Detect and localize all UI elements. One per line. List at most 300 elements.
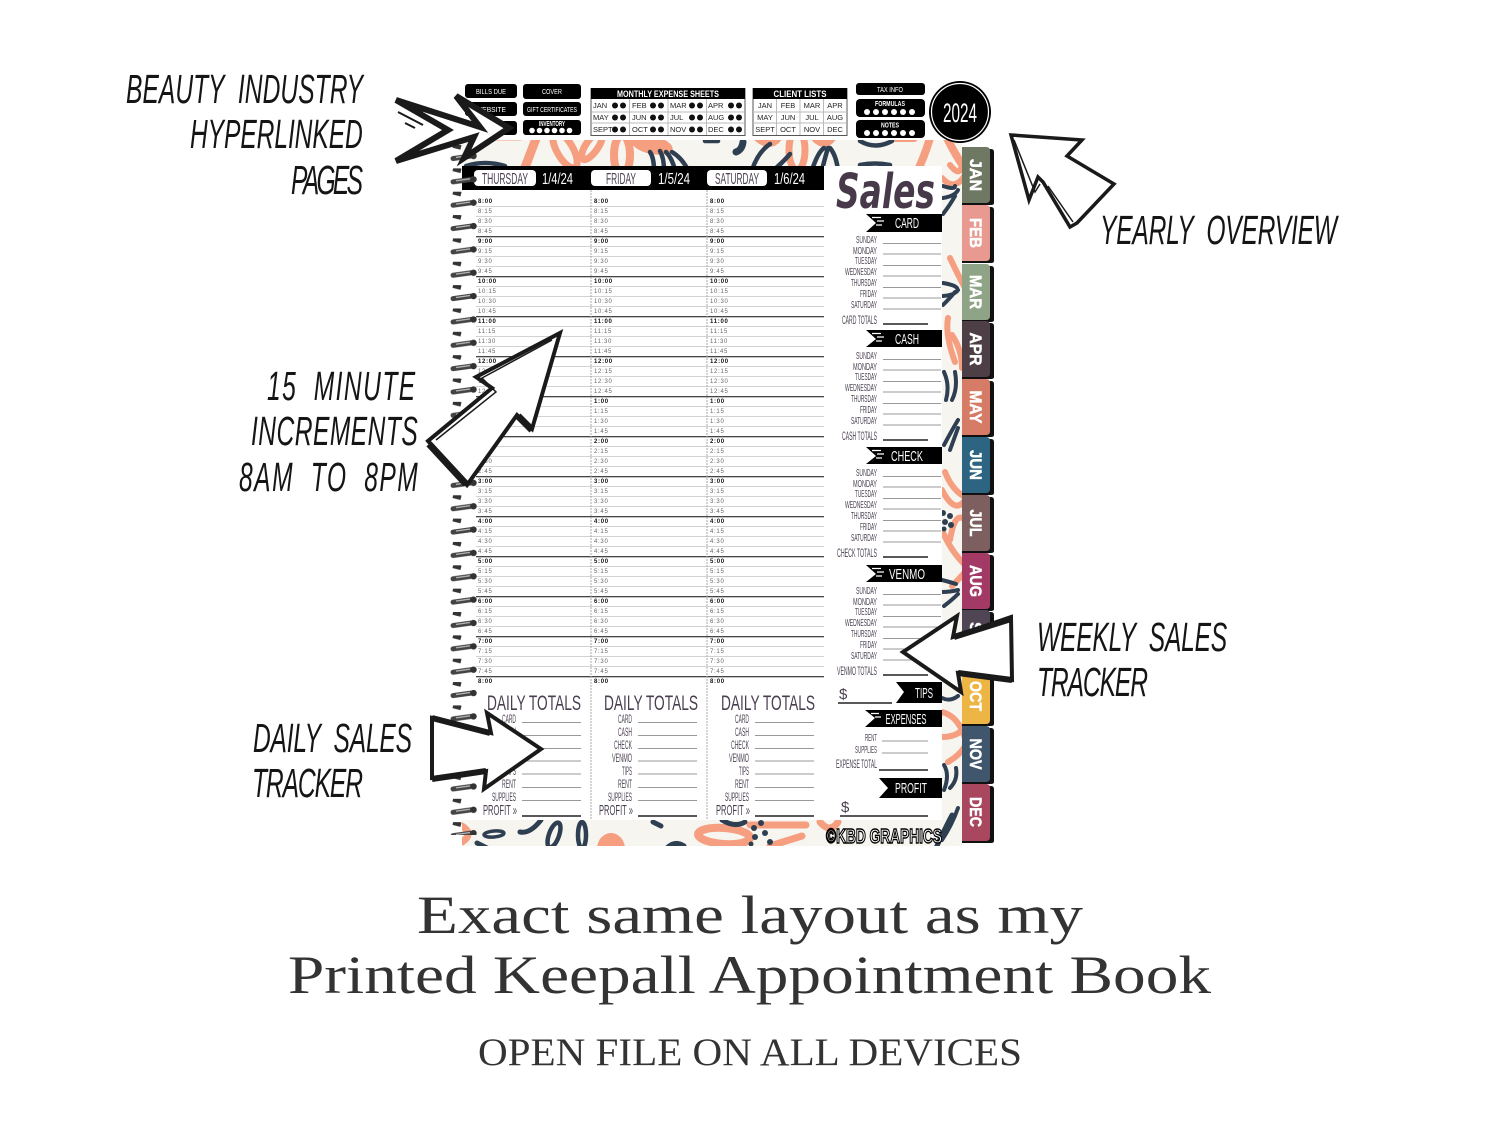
time column: Saturday: 1:45: [710, 429, 724, 435]
time column: Friday: 7:15: [594, 649, 608, 655]
label: 15 minute increments 8am to 8pm: 8AM TO 8PM: [239, 455, 418, 501]
sales tracker: check: THURSDAY: [851, 511, 877, 522]
header bar: three days with dates: FRIDAY: [606, 171, 636, 188]
time column: Thursday: 12:00: [478, 359, 497, 365]
time column: Friday: 2:45: [594, 469, 608, 475]
arrow: yearly overview: [1011, 135, 1114, 227]
sales tracker: check: FRIDAY: [860, 522, 877, 533]
sales tracker: venmo: FRIDAY: [860, 640, 877, 651]
subtitle: OPEN FILE ON ALL DEVICES: [478, 1031, 1022, 1074]
time column: Thursday: 4:30: [478, 539, 492, 545]
daily totals: Thursday: DAILY TOTALS: [487, 692, 581, 715]
month tabs: [962, 147, 994, 843]
time column: Saturday: 7:30: [710, 659, 724, 665]
label: daily sales tracker: [252, 716, 412, 807]
time column: Saturday: 10:00: [710, 279, 729, 285]
time column: Thursday: 10:30: [478, 299, 497, 305]
time column: Saturday: 3:45: [710, 509, 724, 515]
time column: Saturday: 6:15: [710, 609, 724, 615]
time column: Thursday: 2:45: [478, 469, 492, 475]
time column: Saturday: 11:45: [710, 349, 728, 355]
sales tracker: card: CARD: [895, 215, 919, 232]
sales tracker: check: SUNDAY: [856, 468, 877, 479]
time column: Friday: 7:45: [594, 669, 608, 675]
planner page white sheet: [462, 166, 942, 820]
time column: Saturday: 4:00: [710, 519, 725, 525]
time column: Saturday: 8:00: [710, 679, 725, 685]
time column: Saturday: 9:15: [710, 249, 724, 255]
time column: Saturday: 4:15: [710, 529, 724, 535]
time column: Friday: 4:30: [594, 539, 608, 545]
time column: Thursday: 7:15: [478, 649, 492, 655]
time column: Saturday: 2:00: [710, 439, 725, 445]
time column: Friday: 8:00: [594, 199, 609, 205]
daily totals: Thursday: SUPPLIES: [492, 790, 516, 804]
daily totals: Friday: RENT: [618, 777, 632, 791]
time column: Friday: 9:15: [594, 249, 608, 255]
time column: Thursday: 7:00: [478, 639, 493, 645]
sales tracker: card: MONDAY: [853, 246, 877, 257]
tax info, formulas and notes tabs: NOTES: [881, 122, 899, 130]
monthly expense sheets table: FEB: [632, 101, 647, 110]
time column: Saturday: 8:15: [710, 209, 724, 215]
daily totals: Friday: VENMO: [612, 751, 632, 765]
sales tracker: check: WEDNESDAY: [845, 500, 877, 511]
tax info, formulas and notes tabs: FORMULAS: [875, 101, 905, 108]
time column: Saturday: 10:30: [710, 299, 729, 305]
sales tracker: cash: SATURDAY: [851, 416, 877, 427]
time column: Saturday: 9:30: [710, 259, 724, 265]
time column: Thursday: 11:00: [478, 319, 497, 325]
title: [288, 885, 1211, 1005]
daily totals: Friday: TIPS: [622, 764, 632, 778]
daily totals: Friday: [599, 692, 698, 819]
month tabs: DEC: [966, 797, 985, 827]
time column: Saturday: 4:30: [710, 539, 724, 545]
time column: Friday: 12:00: [594, 359, 613, 365]
daily totals: Saturday: [716, 692, 815, 819]
label: weekly sales tracker: [1037, 615, 1228, 706]
time column: Saturday: 5:00: [710, 559, 725, 565]
client lists table: OCT: [780, 125, 796, 134]
time column: Thursday: 9:30: [478, 259, 492, 265]
time column: Friday: 12:45: [594, 389, 613, 395]
time column: Thursday: 12:15: [478, 369, 497, 375]
arrow: 15 minute increments: [428, 333, 560, 485]
time column: Friday: 5:30: [594, 579, 608, 585]
client lists table: AUG: [827, 113, 843, 122]
time column: Thursday: 2:15: [478, 449, 492, 455]
time column: Thursday: 2:30: [478, 459, 492, 465]
tips: [838, 682, 942, 703]
time column: Friday: 11:15: [594, 329, 612, 335]
time column: Saturday: 12:15: [710, 369, 729, 375]
time column: Friday: 12:30: [594, 379, 613, 385]
month tabs: OCT: [966, 681, 985, 712]
time column: Thursday: 4:00: [478, 519, 493, 525]
time column: Saturday: 8:30: [710, 219, 724, 225]
tax info, formulas and notes tabs: [856, 83, 925, 138]
hyperlink tabs, first columns: FORMS: [479, 126, 503, 133]
time column: Thursday: 8:45: [478, 229, 492, 235]
daily totals: Thursday: TIPS: [506, 764, 516, 778]
daily totals: Saturday: CASH: [735, 725, 749, 739]
month tabs: SEP: [966, 622, 985, 654]
daily totals: Thursday: VENMO: [496, 751, 516, 765]
planner page background with floral border: [462, 129, 966, 865]
time column: Thursday: 6:00: [478, 599, 493, 605]
header bar: three days with dates: SATURDAY: [715, 171, 759, 188]
arrow: daily sales tracker: [432, 713, 541, 789]
monthly expense sheets table: MAY: [593, 113, 609, 122]
sales tracker: card: CARD TOTALS: [842, 313, 877, 327]
hyperlink tabs, first columns: INVENTORY: [539, 121, 565, 128]
daily totals: Thursday: RENT: [502, 777, 516, 791]
time column: Friday: 4:00: [594, 519, 609, 525]
header bar: three days with dates: [462, 166, 824, 190]
time column: Thursday: 8:15: [478, 209, 492, 215]
time column: Thursday: 11:15: [478, 329, 496, 335]
monthly expense sheets table: NOV: [670, 125, 686, 134]
time column: Saturday: 12:30: [710, 379, 729, 385]
time column: Friday: 11:00: [594, 319, 613, 325]
label: daily sales tracker: DAILY SALES: [253, 716, 412, 762]
time column: Friday: 5:15: [594, 569, 608, 575]
time column: Thursday: 7:45: [478, 669, 492, 675]
time column: Saturday: 9:00: [710, 239, 725, 245]
time column: Friday: 2:15: [594, 449, 608, 455]
client lists table: [753, 88, 847, 136]
sales tracker: venmo: VENMO: [889, 566, 925, 583]
label: daily sales tracker: TRACKER: [252, 761, 363, 807]
sales tracker: card: SUNDAY: [856, 235, 877, 246]
daily totals: Saturday: CHECK: [731, 738, 749, 752]
time column: Saturday: 5:15: [710, 569, 724, 575]
sales tracker: check: CHECK: [891, 448, 923, 465]
label: beauty industry hyperlinked pages: HYPERLINKED: [190, 112, 363, 158]
label: 15 minute increments 8am to 8pm: [239, 364, 418, 501]
time column: Thursday: 2:00: [478, 439, 493, 445]
profit: [840, 778, 942, 816]
time column: Friday: 11:45: [594, 349, 612, 355]
time column: Friday: 7:00: [594, 639, 609, 645]
hyperlink tabs, first columns: GIFT CERTIFICATES: [527, 107, 577, 114]
time column: Friday: 4:45: [594, 549, 608, 555]
watermark: ©KBD GRAPHICS: [826, 826, 942, 848]
expenses: SUPPLIES: [855, 745, 877, 756]
daily totals: Thursday: [483, 692, 581, 819]
time column: Saturday: 2:30: [710, 459, 724, 465]
sales tracker: card: SATURDAY: [851, 300, 877, 311]
time column: Thursday: [478, 199, 497, 685]
sales tracker: check: MONDAY: [853, 479, 877, 490]
time column: Friday: 10:15: [594, 289, 613, 295]
daily totals: Thursday: PROFIT »: [483, 802, 517, 819]
month tabs: MAR: [966, 275, 985, 309]
expenses: RENT: [865, 733, 877, 744]
month tabs: JAN: [966, 159, 985, 191]
label: weekly sales tracker: TRACKER: [1037, 660, 1148, 706]
time column: Saturday: 8:00: [710, 199, 725, 205]
expenses: EXPENSE TOTAL: [836, 757, 877, 771]
month tabs: NOV: [966, 738, 985, 770]
month tabs: AUG: [966, 565, 985, 597]
label: weekly sales tracker: WEEKLY SALES: [1037, 615, 1228, 661]
monthly expense sheets table: SEPT: [593, 125, 613, 134]
time column: Saturday: 6:30: [710, 619, 724, 625]
sales tracker: cash: TUESDAY: [855, 372, 877, 383]
sales tracker: check: CHECK TOTALS: [837, 546, 877, 560]
monthly expense sheets table: AUG: [708, 113, 724, 122]
time column: Saturday: 11:00: [710, 319, 729, 325]
sales tracker: venmo: SUNDAY: [856, 586, 877, 597]
time column: Saturday: 10:45: [710, 309, 729, 315]
label: yearly overview: YEARLY OVERVIEW: [1100, 208, 1339, 254]
client lists table: DEC: [827, 125, 843, 134]
time column: Friday: 8:45: [594, 229, 608, 235]
time column: Thursday: 1:30: [478, 419, 492, 425]
time column: Friday: 5:00: [594, 559, 609, 565]
sales tracker: check: [837, 447, 942, 560]
client lists table: APR: [827, 101, 843, 110]
month tabs: JUL: [966, 510, 985, 536]
time column: Saturday: 5:45: [710, 589, 724, 595]
client lists table: MAY: [757, 113, 773, 122]
monthly expense sheets table: JAN: [593, 101, 607, 110]
daily totals: Saturday: VENMO: [729, 751, 749, 765]
time column: Friday: 6:45: [594, 629, 608, 635]
time column: Thursday: 1:15: [478, 409, 492, 415]
time column: Saturday: 2:15: [710, 449, 724, 455]
time column: Saturday: 12:45: [710, 389, 729, 395]
hyperlink tabs, first columns: COVER: [542, 89, 562, 96]
month tabs: JUN: [966, 450, 985, 480]
daily totals: Saturday: SUPPLIES: [725, 790, 749, 804]
time column: Saturday: 6:00: [710, 599, 725, 605]
time column: Thursday: 6:30: [478, 619, 492, 625]
time column: Saturday: 2:45: [710, 469, 724, 475]
daily totals: Friday: SUPPLIES: [608, 790, 632, 804]
time column: Thursday: 5:00: [478, 559, 493, 565]
expenses: EXPENSES: [886, 711, 926, 728]
time column: Saturday: 3:30: [710, 499, 724, 505]
time column: Thursday: 10:45: [478, 309, 497, 315]
time column: Friday: 9:00: [594, 239, 609, 245]
client lists table: JAN: [758, 101, 772, 110]
sales tracker: card: WEDNESDAY: [845, 267, 877, 278]
monthly expense sheets table: OCT: [632, 125, 648, 134]
daily totals: Saturday: RENT: [735, 777, 749, 791]
label: 15 minute increments 8am to 8pm: 15 MINUTE: [267, 364, 416, 410]
time column: Saturday: 11:30: [710, 339, 728, 345]
monthly expense sheets table: JUL: [670, 113, 683, 122]
time column: Saturday: 7:15: [710, 649, 724, 655]
time column: Saturday: 1:15: [710, 409, 724, 415]
sales tracker: cash: CASH: [895, 331, 919, 348]
time column: Thursday: 9:45: [478, 269, 492, 275]
time column: Saturday: 3:00: [710, 479, 725, 485]
sales tracker: cash: CASH TOTALS: [842, 429, 877, 443]
time column: Friday: [594, 199, 613, 685]
time column: Saturday: 12:00: [710, 359, 729, 365]
month tabs: FEB: [966, 218, 985, 248]
time column: Friday: 3:45: [594, 509, 608, 515]
year badge 2024: 2024: [943, 98, 977, 128]
time column: Thursday: 8:30: [478, 219, 492, 225]
time column: Friday: 10:00: [594, 279, 613, 285]
time column: Thursday: 6:45: [478, 629, 492, 635]
time column: Thursday: 4:45: [478, 549, 492, 555]
sales tracker: cash: [842, 330, 942, 443]
time column: Friday: 8:15: [594, 209, 608, 215]
tips: TIPS: [915, 685, 933, 702]
header bar: three days with dates: 1/5/24: [658, 171, 690, 188]
daily totals: Thursday: CASH: [502, 725, 516, 739]
header bar: three days with dates: 1/6/24: [774, 171, 805, 188]
time column: Friday: 3:15: [594, 489, 608, 495]
time column: Friday: 2:00: [594, 439, 609, 445]
label: beauty industry hyperlinked pages: BEAUTY INDUSTRY: [126, 67, 365, 113]
monthly expense sheets table: APR: [708, 101, 724, 110]
monthly expense sheets table: MAR: [670, 101, 687, 110]
daily totals: Friday: CARD: [618, 712, 632, 726]
client lists table: JUN: [781, 113, 795, 122]
time column: Thursday: 8:00: [478, 199, 493, 205]
time column: Thursday: 9:15: [478, 249, 492, 255]
monthly expense sheets table: JUN: [632, 113, 647, 122]
daily totals: Friday: CASH: [618, 725, 632, 739]
time column: Thursday: 1:00: [478, 399, 493, 405]
daily totals: Friday: PROFIT »: [599, 802, 633, 819]
time column: Thursday: 3:45: [478, 509, 492, 515]
hyperlink tabs, first columns: WEBSITE: [476, 107, 506, 114]
time column: Thursday: 11:30: [478, 339, 496, 345]
expenses: [836, 710, 942, 771]
time column: Saturday: 10:15: [710, 289, 729, 295]
client lists table: NOV: [804, 125, 820, 134]
time column: Thursday: 1:45: [478, 429, 492, 435]
time column: Saturday: 11:15: [710, 329, 728, 335]
time column: Friday: 8:30: [594, 219, 608, 225]
daily totals: Friday: DAILY TOTALS: [604, 692, 698, 715]
spiral binding: [450, 145, 482, 835]
time column: Thursday: 5:30: [478, 579, 492, 585]
time column: Saturday: [710, 199, 729, 685]
time column: Friday: 3:30: [594, 499, 608, 505]
time column: Thursday: 12:30: [478, 379, 497, 385]
time column: Thursday: 3:00: [478, 479, 493, 485]
time column: Friday: 10:45: [594, 309, 613, 315]
year badge 2024: [929, 81, 991, 143]
time column: Saturday: 9:45: [710, 269, 724, 275]
time column: Saturday: 8:45: [710, 229, 724, 235]
time column: Saturday: 1:30: [710, 419, 724, 425]
time column: Thursday: 9:00: [478, 239, 493, 245]
time column: Friday: 9:30: [594, 259, 608, 265]
time column: Friday: 6:30: [594, 619, 608, 625]
arrow: weekly sales tracker: [903, 616, 1012, 692]
client lists table: FEB: [781, 101, 795, 110]
sales tracker: cash: MONDAY: [853, 362, 877, 373]
sales tracker: check: SATURDAY: [851, 533, 877, 544]
time column: Friday: 6:15: [594, 609, 608, 615]
profit: PROFIT: [895, 780, 927, 797]
sales tracker: venmo: TUESDAY: [855, 607, 877, 618]
time column: Friday: 6:00: [594, 599, 609, 605]
time column: Saturday: 7:00: [710, 639, 725, 645]
time column: Friday: 2:30: [594, 459, 608, 465]
client lists table: MAR: [804, 101, 821, 110]
sales tracker: cash: FRIDAY: [860, 405, 877, 416]
time column: Saturday: 3:15: [710, 489, 724, 495]
sales tracker: venmo: MONDAY: [853, 597, 877, 608]
client lists table: JUL: [805, 113, 819, 122]
monthly expense sheets table: [591, 88, 745, 136]
sales tracker: cash: THURSDAY: [851, 394, 877, 405]
profit: $: [841, 799, 850, 816]
time column: Friday: 7:30: [594, 659, 608, 665]
time column: Friday: 11:30: [594, 339, 612, 345]
daily totals: Saturday: CARD: [735, 712, 749, 726]
time column: Saturday: 4:45: [710, 549, 724, 555]
sales tracker: venmo: SATURDAY: [851, 651, 877, 662]
arrow: hyperlinked pages: [396, 96, 509, 161]
time column: Thursday: 3:15: [478, 489, 492, 495]
month tabs: APR: [966, 332, 985, 366]
time column: Friday: 1:15: [594, 409, 608, 415]
daily totals: Thursday: CHECK: [498, 738, 516, 752]
sales tracker: venmo: [837, 565, 942, 678]
daily totals: Saturday: PROFIT »: [716, 802, 750, 819]
time column: Friday: 1:30: [594, 419, 608, 425]
month tabs: MAY: [966, 390, 985, 424]
time column: Thursday: 7:30: [478, 659, 492, 665]
sales tracker: cash: WEDNESDAY: [845, 383, 877, 394]
client lists table: CLIENT LISTS: [774, 89, 826, 99]
daily totals: Friday: CHECK: [614, 738, 632, 752]
time column: Saturday: 7:45: [710, 669, 724, 675]
hyperlink tabs, first columns: BILLS DUE: [476, 89, 506, 96]
sales tracker: card: THURSDAY: [851, 278, 877, 289]
time column: Saturday: 5:30: [710, 579, 724, 585]
sales tracker: venmo: WEDNESDAY: [845, 618, 877, 629]
time column: Thursday: 6:15: [478, 609, 492, 615]
time column: Thursday: 8:00: [478, 679, 493, 685]
label: beauty industry hyperlinked pages: [126, 67, 365, 204]
tax info, formulas and notes tabs: TAX INFO: [877, 87, 903, 94]
label: beauty industry hyperlinked pages: PAGES: [291, 158, 363, 204]
sales tracker: venmo: THURSDAY: [851, 629, 877, 640]
client lists table: SEPT: [755, 125, 775, 134]
daily totals: Saturday: TIPS: [739, 764, 749, 778]
time column: Friday: 9:45: [594, 269, 608, 275]
time column: Friday: 4:15: [594, 529, 608, 535]
sales tracker: card: [842, 214, 942, 327]
time column: Friday: 3:00: [594, 479, 609, 485]
time column: Saturday: 6:45: [710, 629, 724, 635]
daily totals: Thursday: CARD: [502, 712, 516, 726]
sales tracker: card: FRIDAY: [860, 289, 877, 300]
time column: Thursday: 4:15: [478, 529, 492, 535]
sales tracker: cash: SUNDAY: [856, 351, 877, 362]
time column: Thursday: 12:45: [478, 389, 497, 395]
header bar: three days with dates: THURSDAY: [482, 171, 528, 188]
time column: Thursday: 10:00: [478, 279, 497, 285]
daily totals: Saturday: DAILY TOTALS: [721, 692, 815, 715]
title: Printed Keepall Appointment Book: [288, 945, 1211, 1005]
time column: Friday: 1:45: [594, 429, 608, 435]
label: 15 minute increments 8am to 8pm: INCREMENTS: [251, 409, 418, 455]
